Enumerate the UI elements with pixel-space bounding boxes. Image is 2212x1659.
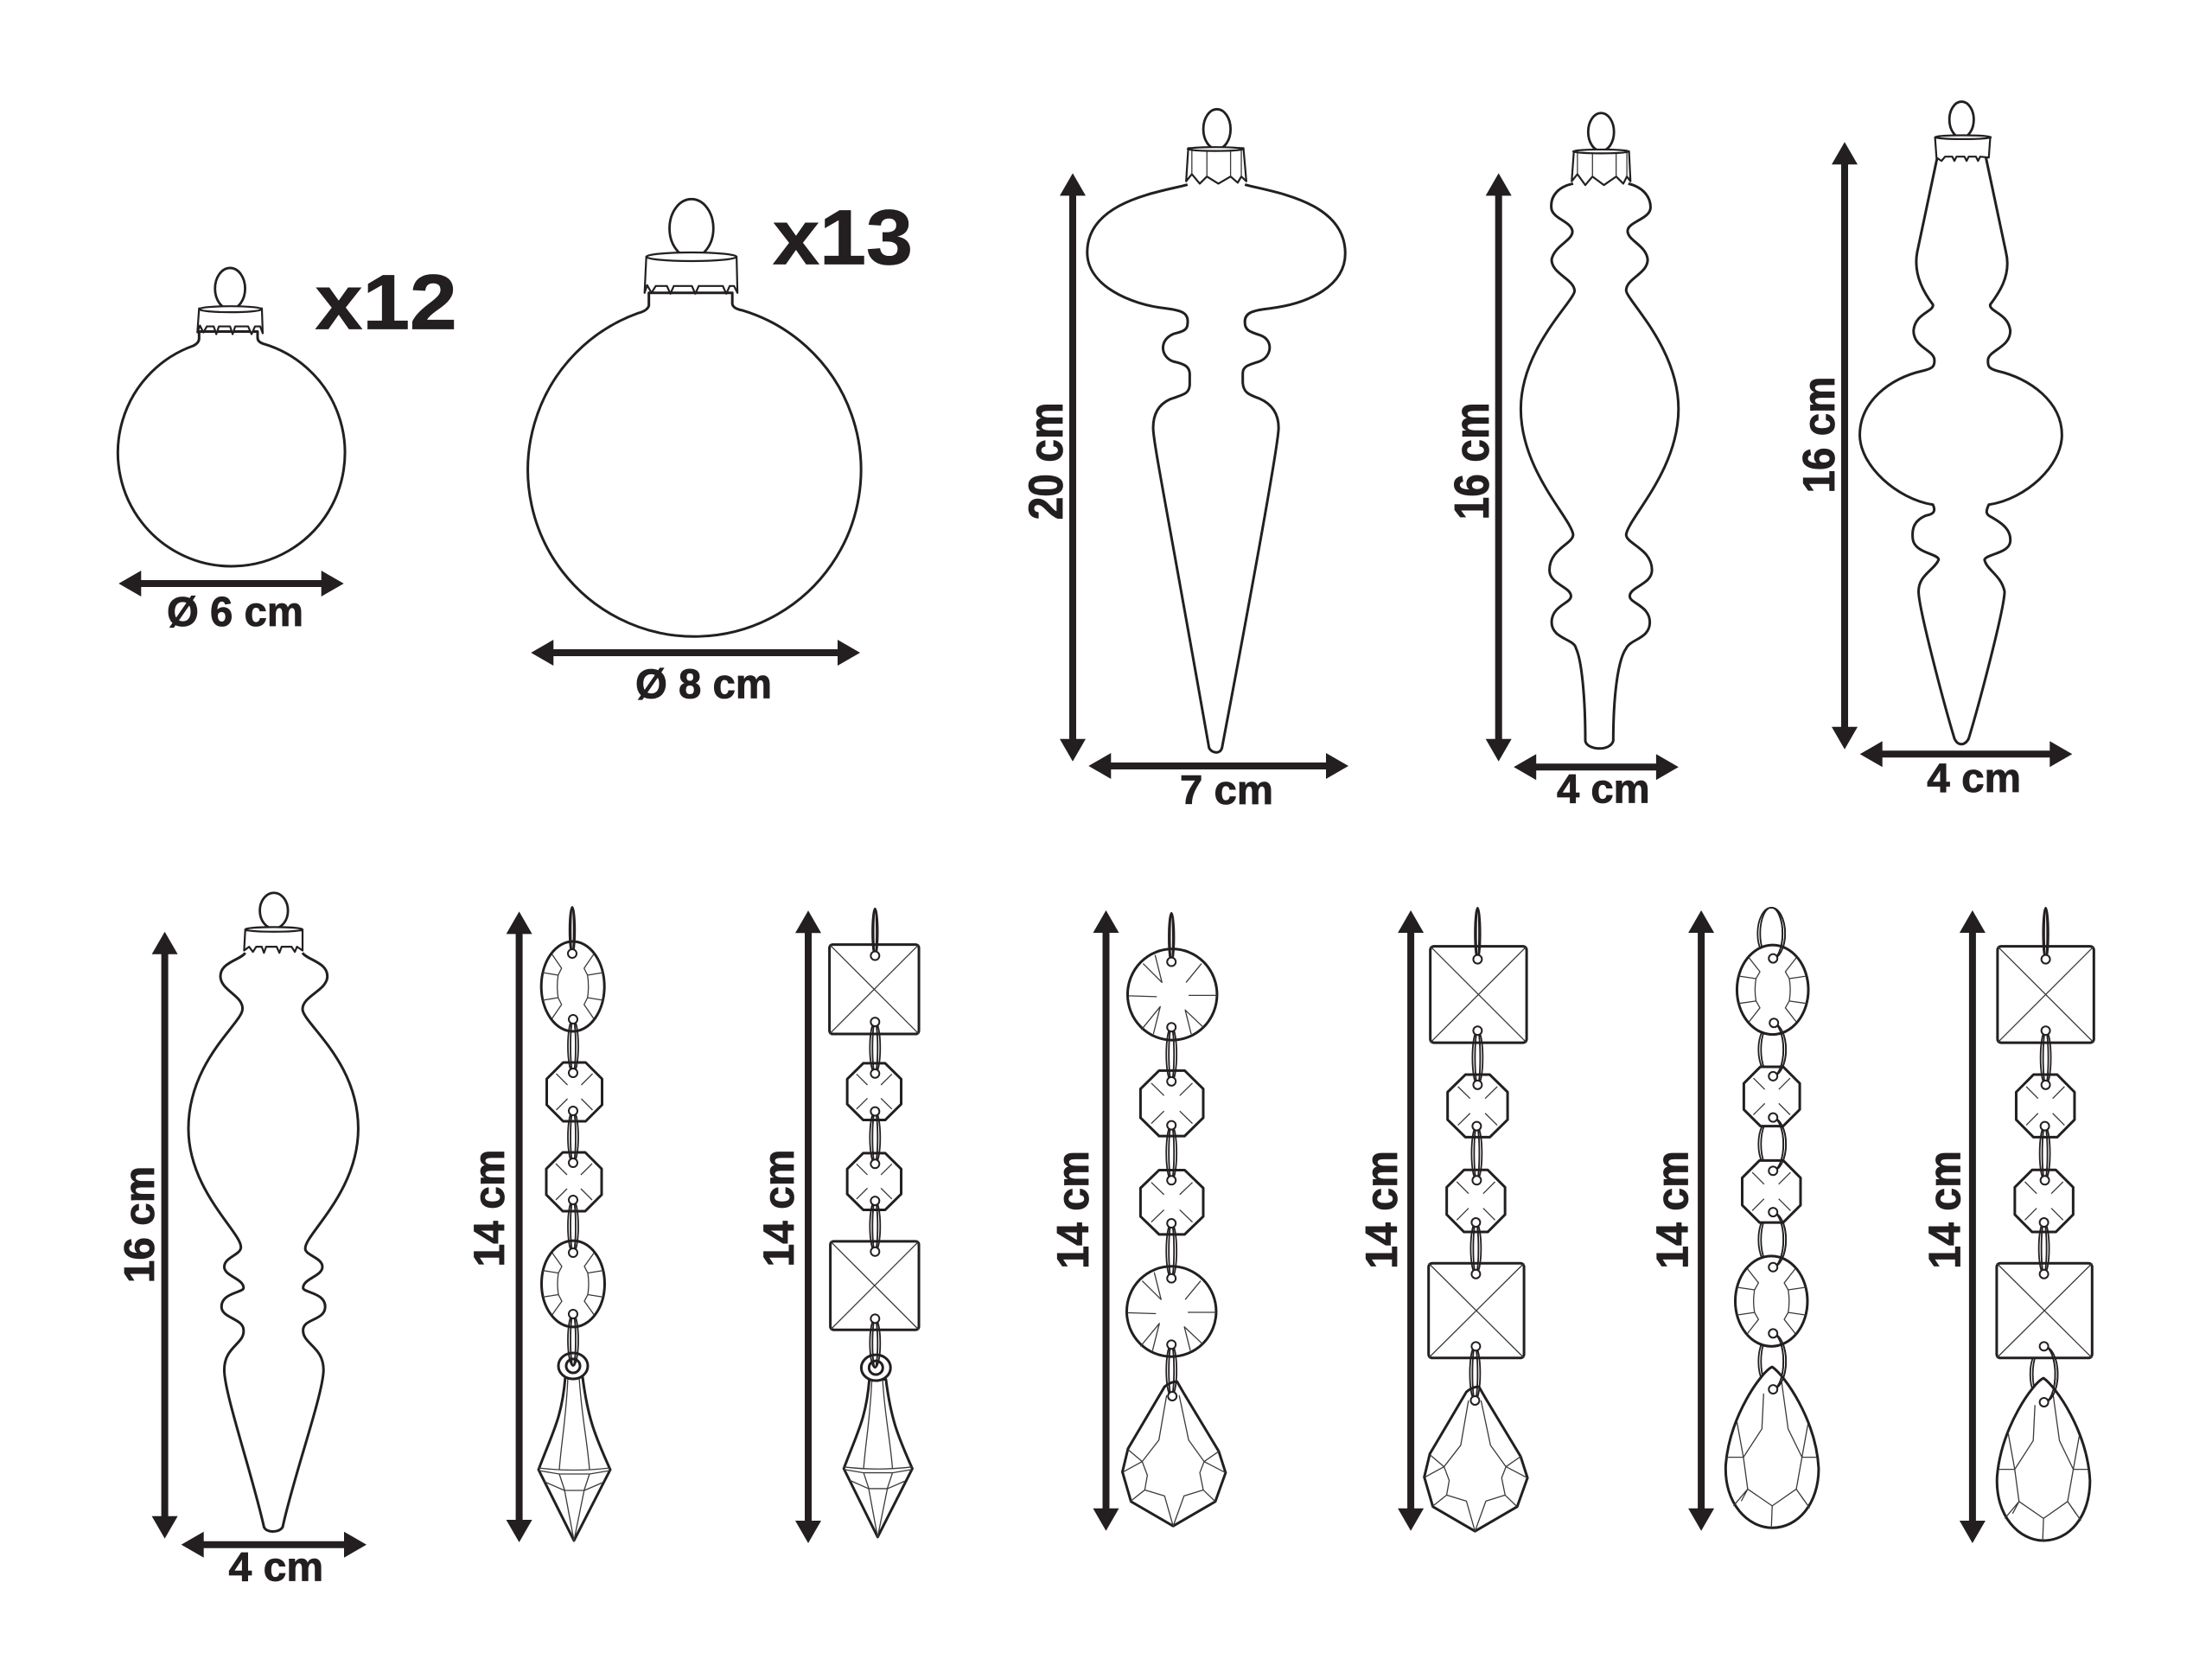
icon: small bauble outline xyxy=(118,268,345,566)
label: diameter 6 cm: Ø 6 cm xyxy=(167,590,303,635)
arrow: height 20 cm xyxy=(1060,173,1086,762)
arrow: height 16 cm xyxy=(1486,173,1512,762)
label: 16 cm: 16 cm xyxy=(117,1166,163,1283)
label: 14 cm: 14 cm xyxy=(755,1150,803,1267)
panel: crystal string, wide squares and teardrop xyxy=(1920,908,2094,1543)
label: 14 cm: 14 cm xyxy=(1357,1151,1407,1269)
icon: crystal string xyxy=(1997,908,2094,1541)
arrow: height 14 cm xyxy=(1688,910,1714,1531)
arrow: width 4 cm xyxy=(182,1532,367,1558)
icon: crystal string xyxy=(1122,913,1226,1526)
label: diameter 8 cm: Ø 8 cm xyxy=(635,661,772,707)
panel: finial 16 cm by 4 cm, teardrop centre xyxy=(117,893,367,1589)
panel: finial 20 cm by 7 cm xyxy=(1018,109,1348,813)
panel: crystal string, squares and pear drop xyxy=(1357,908,1527,1531)
arrow: height 14 cm xyxy=(1093,910,1119,1531)
panel: crystal string, rounds and pear drop xyxy=(1049,910,1226,1531)
panel: crystal string, ovals and prism xyxy=(465,907,610,1542)
icon: round-centre finial xyxy=(1860,102,2062,744)
arrow: height 14 cm xyxy=(795,910,821,1543)
arrow: width 4 cm xyxy=(1860,741,2072,767)
panel: finial 16 cm by 4 cm, round centre xyxy=(1794,102,2072,801)
arrow: width 8 cm xyxy=(531,640,860,666)
label: 16 cm: 16 cm xyxy=(1444,402,1500,520)
panel: large bauble 8 cm xyxy=(528,195,913,707)
label: 7 cm: 7 cm xyxy=(1180,767,1273,813)
label: quantity x12: x12 xyxy=(316,259,457,346)
label: quantity x13: x13 xyxy=(773,195,913,282)
arrow: width 7 cm xyxy=(1088,753,1348,779)
panel: finial 16 cm by 4 cm, beaded xyxy=(1444,113,1679,811)
arrow: height 14 cm xyxy=(507,911,532,1542)
icon: crystal string xyxy=(1425,908,1527,1531)
arrow: height 16 cm xyxy=(1832,142,1858,750)
icon: crystal string xyxy=(539,907,610,1541)
label: 20 cm: 20 cm xyxy=(1018,402,1073,520)
label: 14 cm: 14 cm xyxy=(1049,1151,1099,1269)
label: 14 cm: 14 cm xyxy=(1648,1151,1698,1269)
icon: large bauble outline xyxy=(528,199,861,636)
icon: onion finial xyxy=(1087,109,1345,752)
label: 4 cm: 4 cm xyxy=(1557,765,1650,811)
label: 4 cm: 4 cm xyxy=(1927,755,2021,801)
label: 16 cm: 16 cm xyxy=(1794,377,1845,493)
label: 14 cm: 14 cm xyxy=(1920,1151,1970,1269)
icon: crystal string xyxy=(830,909,919,1537)
panel: crystal string, large rings and teardrop xyxy=(1648,908,1819,1531)
label: 14 cm: 14 cm xyxy=(465,1150,513,1267)
arrow: height 16 cm xyxy=(152,932,178,1539)
arrow: width 6 cm xyxy=(118,571,344,597)
icon: teardrop finial xyxy=(188,893,358,1532)
icon: beaded finial xyxy=(1520,113,1679,749)
panel: small bauble 6 cm xyxy=(118,259,457,635)
arrow: height 14 cm xyxy=(1960,910,1986,1543)
icon: crystal string xyxy=(1725,908,1819,1528)
arrow: width 4 cm xyxy=(1514,754,1679,780)
arrow: height 14 cm xyxy=(1398,910,1424,1531)
label: 4 cm: 4 cm xyxy=(228,1543,323,1589)
panel: crystal string, squares and prism xyxy=(755,909,919,1543)
